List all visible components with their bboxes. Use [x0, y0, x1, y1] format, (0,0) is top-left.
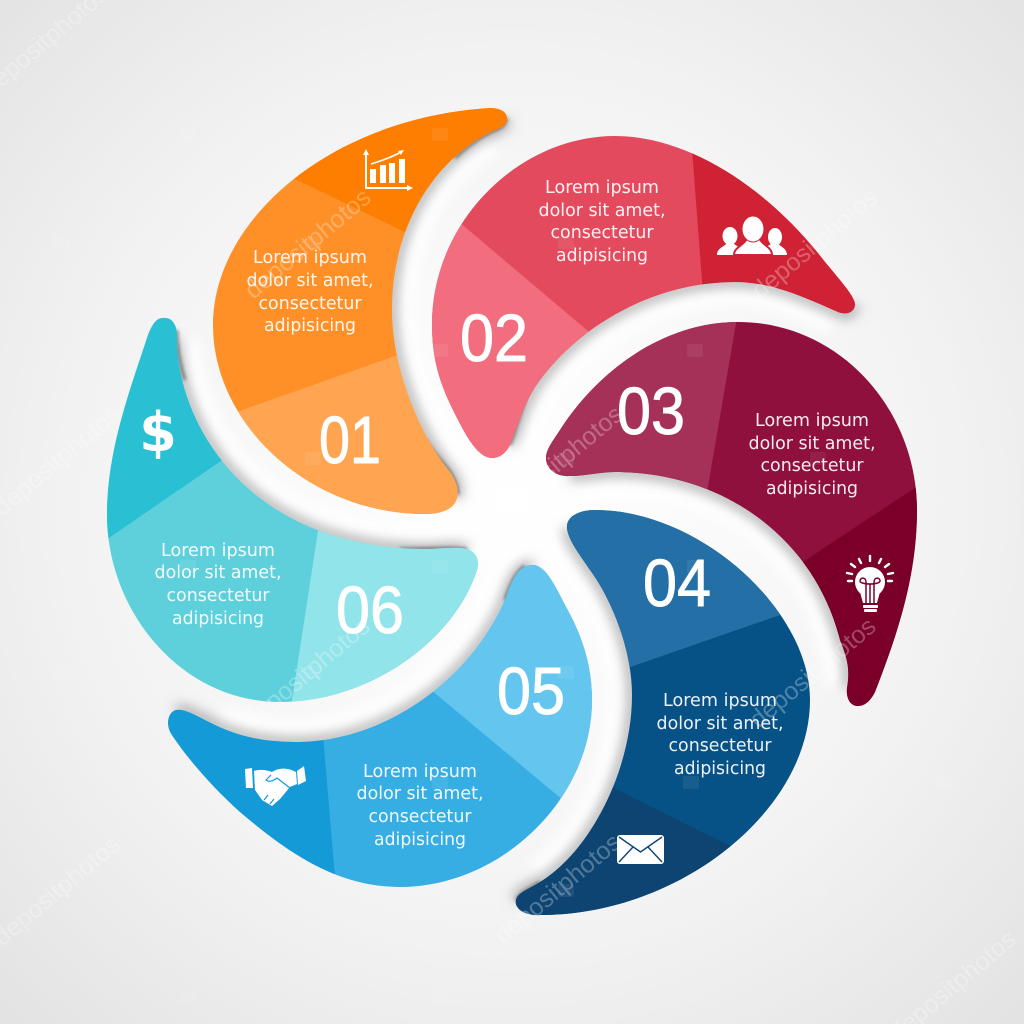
watermarks: depositphotos — [489, 828, 626, 950]
faint camera watermark marks — [54, 128, 951, 1003]
text 01 — [246, 247, 374, 336]
panel: step 02 red — [432, 136, 856, 458]
text 04: consectetur — [668, 735, 772, 756]
text 01: dolor sit amet, — [246, 270, 374, 291]
dark shadow accents near the segment tips — [177, 118, 540, 900]
text 05: adipisicing — [374, 829, 466, 850]
text 02: Lorem ipsum — [545, 177, 659, 198]
panel: step 03 maroon — [546, 322, 917, 706]
icon: people — [717, 216, 787, 255]
text 03: Lorem ipsum — [755, 410, 869, 431]
segment shape 06 — [107, 318, 478, 702]
panel: step 01 orange — [213, 108, 508, 514]
segment shape 05 — [168, 565, 592, 887]
text 02: adipisicing — [556, 245, 648, 266]
watermarks: depositphotos — [744, 612, 881, 734]
text 06: adipisicing — [172, 608, 264, 629]
icon: bar chart — [363, 149, 413, 191]
number 03: 03 — [617, 374, 685, 449]
text 04: dolor sit amet, — [656, 713, 784, 734]
text 04 — [656, 690, 784, 779]
icon: envelope — [617, 835, 664, 864]
text 02 — [538, 177, 666, 266]
text 05 — [356, 761, 484, 850]
text 01: adipisicing — [264, 315, 356, 336]
soft shadows along the inner edges — [176, 120, 855, 900]
icon: handshake — [245, 766, 306, 806]
panel: step 04 blue — [516, 510, 810, 916]
watermarks: depositphotos — [238, 612, 375, 734]
panel: step 05 light blue — [168, 565, 592, 887]
text 03: dolor sit amet, — [748, 433, 876, 454]
text 06: Lorem ipsum — [161, 540, 275, 561]
watermarks: depositphotos — [491, 400, 628, 522]
number 05: 05 — [497, 654, 565, 729]
text 05: consectetur — [368, 806, 472, 827]
text 04: Lorem ipsum — [663, 690, 777, 711]
number 01: 01 — [319, 403, 381, 478]
white swirl bands between segments — [177, 134, 848, 882]
number 04: 04 — [643, 546, 711, 621]
text 02: consectetur — [550, 222, 654, 243]
number 02: 02 — [460, 301, 528, 376]
icon: dollar sign: $ — [139, 401, 177, 464]
text 06: consectetur — [166, 585, 270, 606]
text 05: dolor sit amet, — [356, 783, 484, 804]
segment shape 01 — [213, 108, 508, 514]
text 06: dolor sit amet, — [154, 562, 282, 583]
text 01: consectetur — [258, 293, 362, 314]
text 03: adipisicing — [766, 478, 858, 499]
text 03 — [748, 410, 876, 499]
text 03: consectetur — [760, 455, 864, 476]
text 05: Lorem ipsum — [363, 761, 477, 782]
number 06: 06 — [336, 573, 404, 648]
text 06 — [154, 540, 282, 629]
segment shape 03 — [546, 322, 917, 706]
text 01: Lorem ipsum — [253, 247, 367, 268]
watermarks: depositphotos — [239, 183, 376, 305]
segment shape 04 — [516, 510, 810, 916]
watermarks: depositphotos — [746, 183, 883, 305]
text 02: dolor sit amet, — [538, 200, 666, 221]
segment shape 02 — [432, 136, 856, 458]
text 04: adipisicing — [674, 758, 766, 779]
panel: step 06 teal — [107, 318, 478, 702]
icon: light bulb — [847, 556, 893, 612]
